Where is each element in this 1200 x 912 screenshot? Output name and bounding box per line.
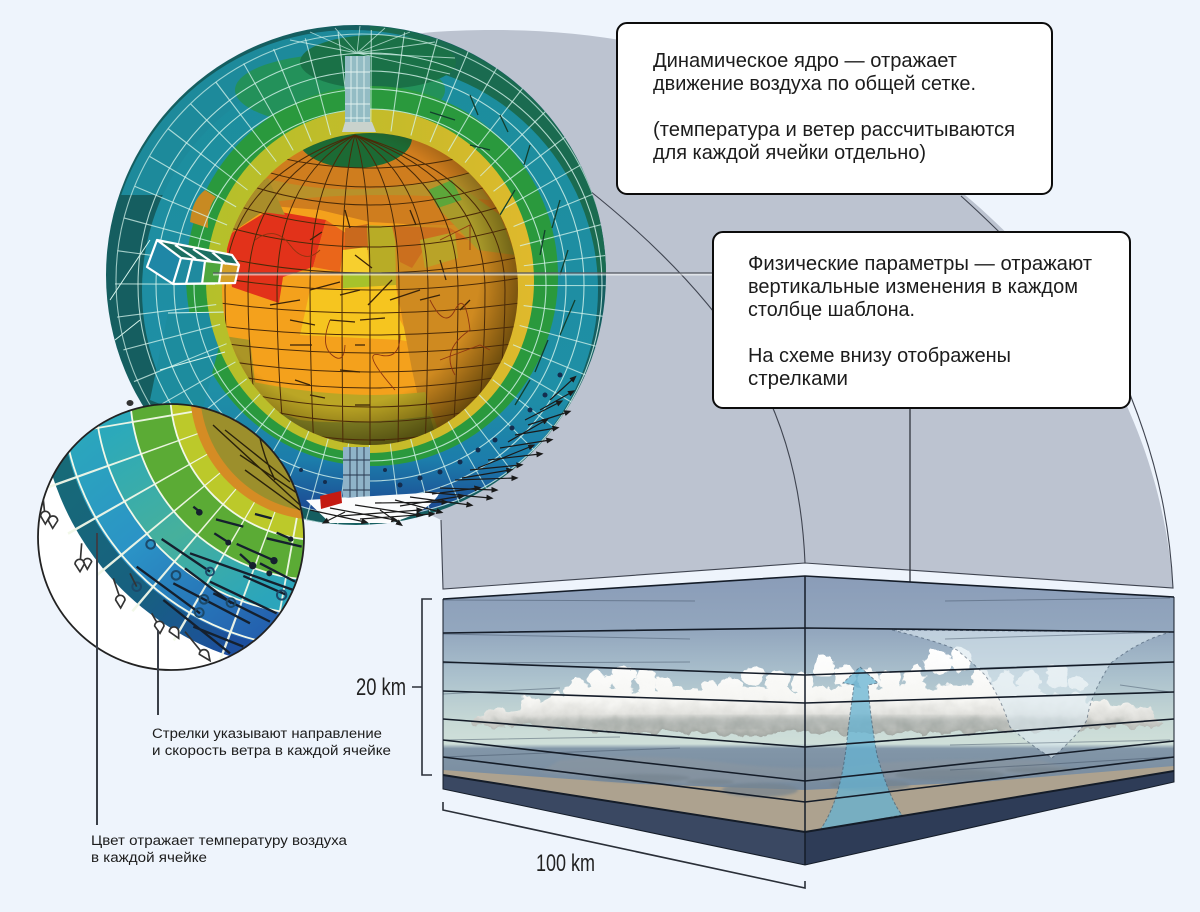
callout: physical parameters: Физические параметры — отражают xyxy=(748,253,1092,275)
core lower left olive xyxy=(229,336,255,387)
callout: physical parameters: стрелками xyxy=(748,368,848,390)
inner core sphere xyxy=(222,133,518,445)
globe outer dark shell xyxy=(106,25,606,525)
wind dots on lower shell xyxy=(299,372,562,488)
inset wind arrows xyxy=(41,500,302,661)
box bell shaped light zone xyxy=(892,630,1171,758)
box cloud base shading xyxy=(510,716,1090,728)
box faint thin lines xyxy=(443,598,1170,770)
box base left face xyxy=(443,775,805,865)
callout: physical parameters xyxy=(713,232,1130,408)
core lower olive band xyxy=(251,382,437,444)
inset orange rim xyxy=(191,406,302,519)
panel: magnified inset circle xyxy=(37,403,305,671)
inset upper core cell xyxy=(228,418,240,424)
inset yellow-green layer xyxy=(172,404,304,538)
caption: arrows xyxy=(152,726,391,758)
globe upper left orange rim xyxy=(190,190,216,228)
globe upper right dark green edge xyxy=(370,26,606,275)
bottom column cut xyxy=(343,447,370,505)
callout: dynamic core: движение воздуха по общей сетке. xyxy=(653,73,976,95)
box ground xyxy=(443,766,1174,840)
globe top green band xyxy=(235,54,445,126)
panel: grey projection wedge behind callouts xyxy=(400,30,1173,589)
shell wind dashes xyxy=(430,95,575,405)
callout: dynamic core xyxy=(617,23,1052,194)
core olive upper left xyxy=(232,178,285,232)
core coastlines xyxy=(255,225,490,390)
bracket: width xyxy=(443,802,805,888)
wind arrows on lower rim xyxy=(310,378,574,524)
core red zone xyxy=(225,210,326,303)
globe polar cap xyxy=(300,35,456,89)
callout: physical parameters: вертикальные изменения в каждом xyxy=(748,276,1078,298)
core brown cell xyxy=(345,224,368,250)
top column cut xyxy=(342,56,376,132)
box layer lines xyxy=(443,576,1174,865)
label: 20 km: 20 km xyxy=(356,674,406,701)
caption: arrows: и скорость ветра в каждой ячейке xyxy=(152,743,391,758)
leader line from callout to column box xyxy=(909,408,911,582)
core dark red notch xyxy=(232,180,264,232)
core olive centre cells xyxy=(367,225,396,286)
callout: dynamic core: для каждой ячейки отдельно) xyxy=(653,142,926,164)
box sky background xyxy=(443,576,1174,866)
shell grid lines xyxy=(110,26,608,526)
atmospheric column box xyxy=(443,576,1174,866)
box water band blotches xyxy=(540,756,1080,785)
box base right face xyxy=(805,771,1174,865)
callout: physical parameters: На схеме внизу отображены xyxy=(748,345,1011,367)
box ground cloud shadows xyxy=(590,767,1075,797)
core olive ring xyxy=(264,173,490,202)
caption: arrows: Стрелки указывают направление xyxy=(152,726,382,741)
callout: physical parameters: столбце шаблона. xyxy=(748,299,915,321)
red cell xyxy=(320,491,342,509)
core green cell upper right xyxy=(428,180,462,208)
icon: white outlined column cube on globe xyxy=(147,240,239,284)
caption: colour: Цвет отражает температуру воздуха xyxy=(91,833,348,848)
globe teal layer xyxy=(142,62,598,518)
caption: colour: в каждой ячейке xyxy=(91,850,207,865)
core bright yellow zone xyxy=(300,285,412,342)
core olive mid right xyxy=(420,232,458,268)
core bottom olive band xyxy=(280,412,434,445)
inset grid xyxy=(48,404,304,660)
inset teal layer xyxy=(106,433,296,610)
globe upper left teal shell xyxy=(121,30,415,195)
callout: dynamic core: Динамическое ядро — отражает xyxy=(653,50,957,72)
callout: dynamic core: (температура и ветер рассчитываются xyxy=(653,119,1015,141)
inset cyan-blue layer xyxy=(68,428,279,641)
globe: cutaway model of atmosphere xyxy=(106,25,608,526)
caption: colour xyxy=(91,833,348,865)
inset core surface xyxy=(202,408,300,510)
core polar cap xyxy=(302,133,412,168)
bracket: height xyxy=(412,599,432,775)
globe green layer xyxy=(186,86,558,466)
core green cell xyxy=(343,274,370,288)
core grid xyxy=(220,135,520,450)
leader line: arrows xyxy=(157,630,159,715)
core yellow cell xyxy=(343,247,370,273)
inset core grid xyxy=(212,424,300,511)
core wind dashes xyxy=(270,210,470,440)
leader line: color xyxy=(96,533,98,825)
inset green layer xyxy=(132,404,303,578)
box clouds xyxy=(472,648,1162,734)
label: 100 km: 100 km xyxy=(536,850,595,877)
box updraft arrow xyxy=(820,667,902,830)
lower white arrow zone xyxy=(306,492,440,523)
globe lower left shell panel xyxy=(150,312,228,420)
core orange red xyxy=(313,220,345,272)
core rim shading xyxy=(241,136,518,445)
inset dark edge xyxy=(53,454,252,656)
small marker near left edge xyxy=(126,400,134,406)
core red-orange right xyxy=(392,226,470,268)
leader line from column to callout xyxy=(213,273,713,274)
core upper band xyxy=(251,133,508,232)
core right darker zone xyxy=(395,225,518,432)
core olive upper right xyxy=(438,180,515,255)
globe yellow layer xyxy=(206,109,534,453)
